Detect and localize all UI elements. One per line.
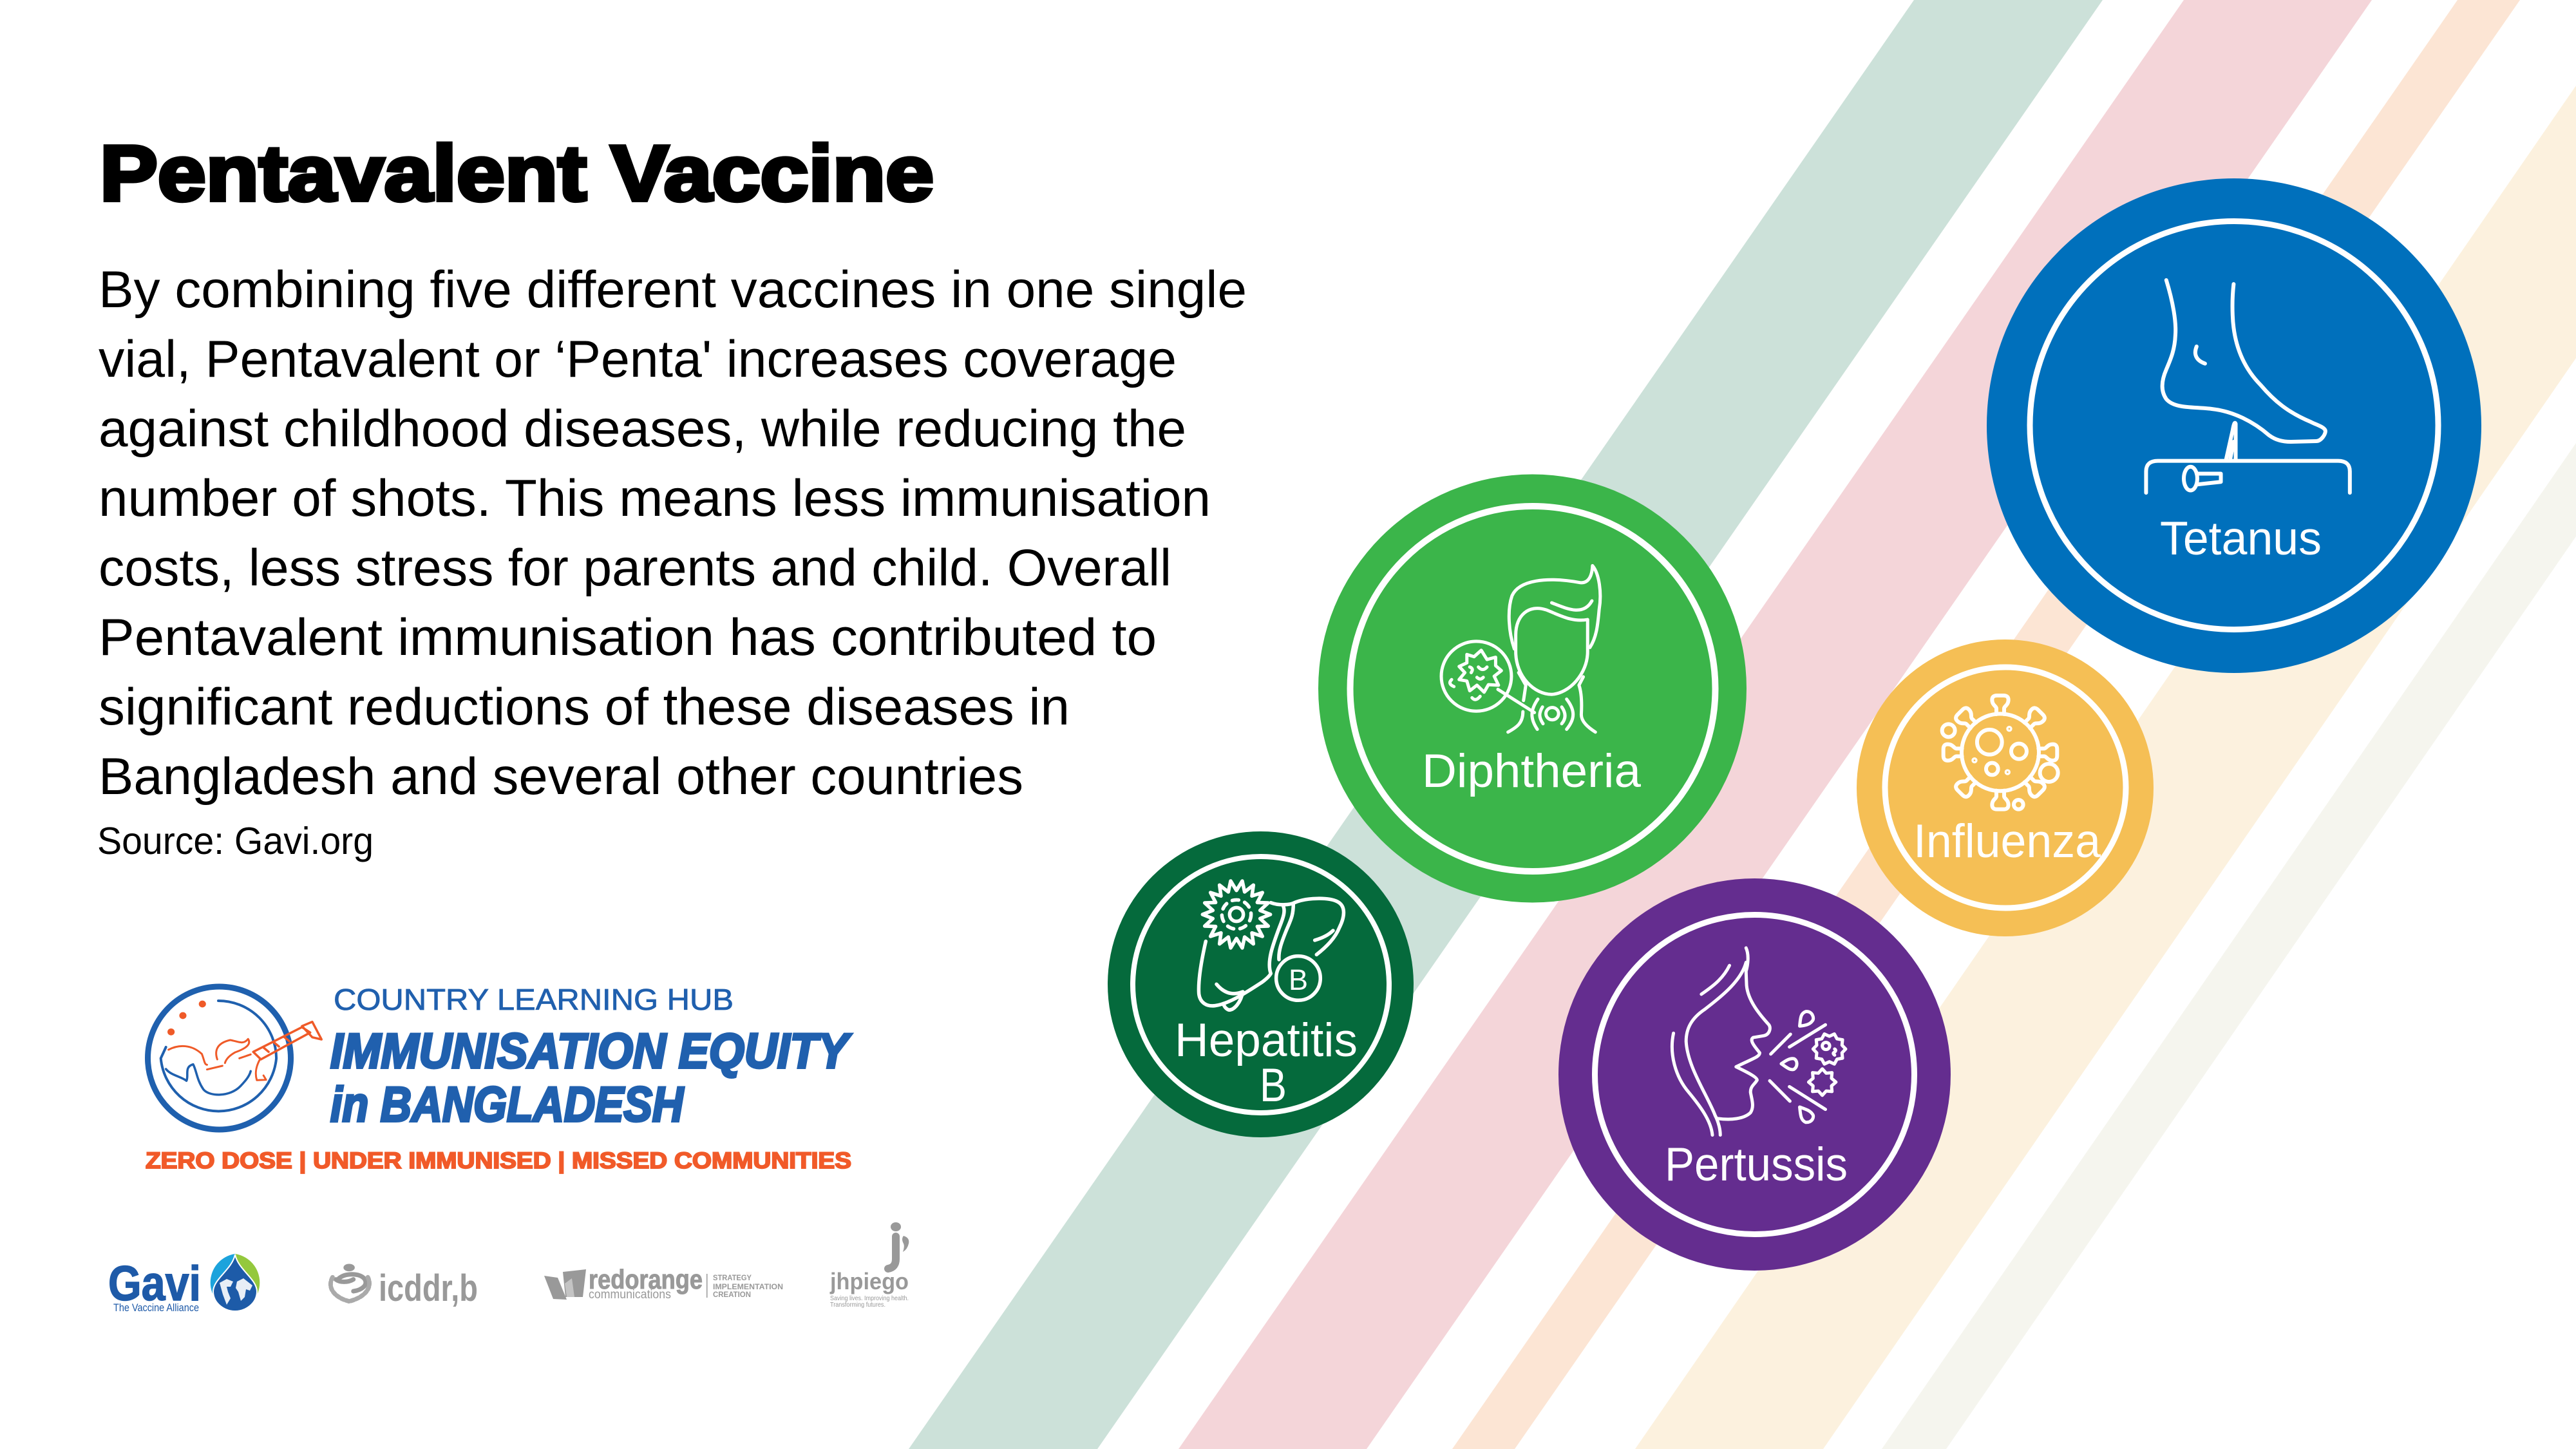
logo: redorange communications: CREATION [713, 1290, 751, 1299]
icon letter: B: B [1289, 963, 1308, 996]
logo: jhpiego [829, 1222, 909, 1309]
logo: jhpiego: jhpiego [829, 1268, 909, 1294]
logo text: country learning hub: COUNTRY LEARNING HUB [334, 983, 734, 1016]
logo: icddr,b [330, 1264, 478, 1309]
icon: liver with virus [1198, 881, 1343, 1010]
logo text: immunisation equity: IMMUNISATION EQUITY [330, 1024, 852, 1079]
label: Tetanus: Tetanus [2160, 513, 2322, 565]
logo: redorange communications: STRATEGY [713, 1273, 752, 1282]
text block: description: costs, less stress for parents and child. Overall [99, 539, 1171, 597]
panel: Tetanus [1987, 178, 2481, 673]
icon: coughing face [1672, 948, 1846, 1135]
text block: description: against childhood diseases, while reducing the [99, 400, 1186, 458]
logo: redorange communications: redorange [589, 1264, 703, 1294]
label: Pertussis: Pertussis [1665, 1139, 1848, 1191]
panel: Country Learning Hub logo [146, 983, 852, 1173]
logo: Gavi: Gavi [108, 1256, 201, 1311]
panel: Diphtheria [1318, 474, 1747, 903]
panel: Influenza [1857, 639, 2154, 936]
text block: description: By combining five different vaccines in one single [99, 261, 1247, 319]
logo: redorange communications: IMPLEMENTATION [713, 1282, 783, 1291]
logo text: in Bangladesh: in BANGLADESH [330, 1077, 685, 1132]
text block: description: Bangladesh and several other countries [99, 748, 1023, 806]
logo: jhpiego: Saving lives. Improving health. [830, 1294, 909, 1302]
text block: description: Pentavalent immunisation has contributed to [99, 609, 1157, 667]
text block: description: significant reductions of these diseases in [99, 678, 1070, 736]
text block: description: vial, Pentavalent or ‘Penta' increases coverage [99, 330, 1177, 388]
text block: description [99, 261, 1247, 806]
source note: Source: Gavi.org [97, 820, 374, 862]
icon: hub emblem with baby and syringe [148, 987, 321, 1130]
label: Hepatitis B [1175, 1014, 1358, 1112]
logo: redorange communications [544, 1264, 783, 1302]
icon: virus [1942, 696, 2058, 810]
label: Influenza: Influenza [1913, 815, 2101, 867]
logo: Gavi [108, 1254, 260, 1314]
label: Hepatitis B: B [1260, 1059, 1287, 1112]
logo: icddr,b: icddr,b [379, 1267, 478, 1309]
logo: redorange communications: communications [589, 1288, 671, 1302]
icon: head with throat infection [1441, 565, 1600, 732]
logo: Gavi: The Vaccine Alliance [113, 1302, 199, 1314]
panel: Pertussis [1558, 878, 1951, 1271]
panel: Hepatitis B [1108, 831, 1414, 1137]
label: Diphtheria: Diphtheria [1422, 745, 1641, 797]
logo tagline: ZERO DOSE | UNDER IMMUNISED | MISSED COMMUNITIES [146, 1148, 851, 1173]
icon: foot stepping on nail [2146, 280, 2350, 493]
title: Pentavalent Vaccine [100, 129, 934, 217]
logo: jhpiego: Transforming futures. [830, 1301, 886, 1309]
text block: description: number of shots. This means less immunisation [99, 469, 1211, 527]
label: Hepatitis B: Hepatitis [1175, 1014, 1358, 1066]
